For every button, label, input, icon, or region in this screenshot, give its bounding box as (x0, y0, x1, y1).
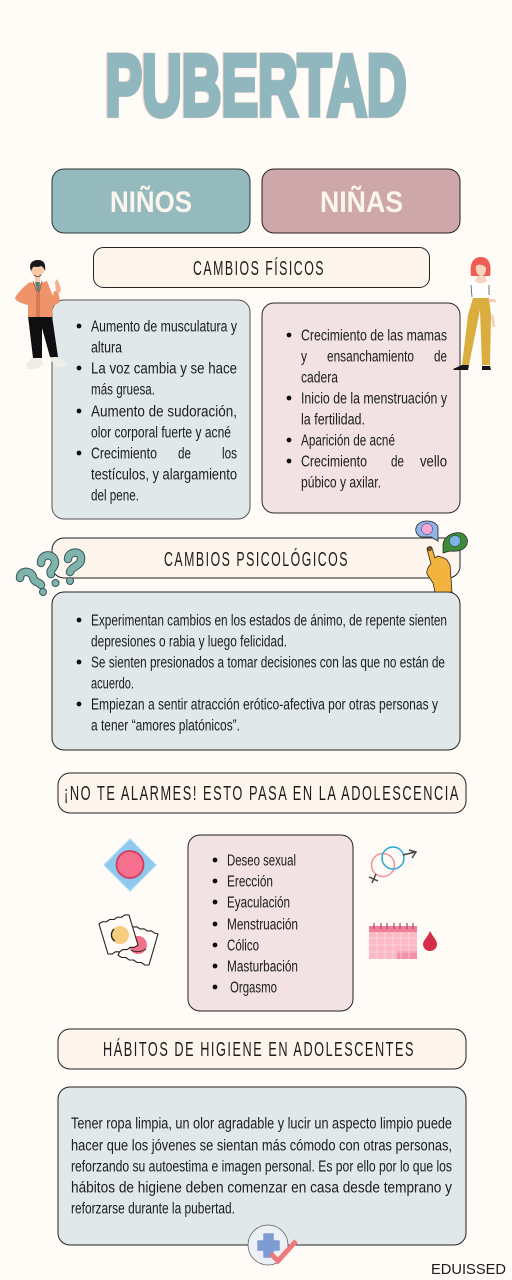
illustration: niño (15, 260, 67, 369)
bullet list: psicológicos: a tener “amores platónicos”. (91, 718, 240, 734)
icon: preservativo azul (104, 839, 156, 891)
heading: cambios físicos (94, 248, 430, 288)
bullet list: niños: olor corporal fuerte y acné (91, 424, 231, 442)
heading: cambios físicos: CAMBIOS FÍSICOS (193, 257, 325, 280)
bullet list: niños: testículos, y alargamiento (91, 466, 237, 484)
panel: cambios físicos niños (52, 300, 250, 519)
bullet list: niñas: Inicio de la menstruación y (301, 390, 447, 408)
bullet list: niñas: ensanchamiento (327, 348, 414, 366)
bullet list: niños: Crecimiento (91, 446, 157, 462)
heading: hábitos de higiene (58, 1029, 466, 1069)
bullet list: psicológicos (77, 612, 447, 734)
bullet list: niñas: de (391, 454, 404, 470)
bullet list: adolescencia: Deseo sexual (227, 852, 296, 870)
bullet list: niños: altura (91, 340, 122, 356)
bullet list: psicológicos: acuerdo. (91, 676, 134, 692)
bullet list: adolescencia: Masturbación (227, 958, 298, 976)
panel: cambios psicológicos (52, 592, 460, 750)
icon: cruz médica con check (248, 1225, 296, 1265)
bullet list: niños: los (222, 446, 237, 462)
bullet list: niñas: la fertilidad. (301, 412, 365, 428)
bullet list: niñas (287, 328, 447, 492)
panel: hábitos de higiene (58, 1087, 466, 1245)
panel: niñas header (262, 169, 460, 233)
bullet list: niños: Aumento de musculatura y (91, 318, 237, 336)
bullet list: psicológicos: depresiones o rabia y luego felicidad. (91, 634, 287, 650)
bullet list: niñas: Crecimiento (301, 454, 367, 470)
heading: cambios psicológicos: CAMBIOS PSICOLÓGICOS (164, 548, 349, 571)
text block: higiene: reforzarse durante la pubertad. (71, 1200, 235, 1218)
heading: cambios psicológicos (52, 538, 460, 578)
bullet list: niños: Aumento de sudoración, (91, 404, 237, 420)
icon: preservativos envueltos (99, 915, 158, 965)
icon: mano con burbujas de chat (416, 521, 467, 592)
panel: niñas header: NIÑAS (320, 185, 403, 219)
panel: niños header (52, 169, 250, 233)
text block: higiene (71, 1116, 452, 1218)
icon: calendario y gota (369, 923, 437, 959)
bullet list: niñas: Crecimiento de las mamas (301, 328, 447, 344)
bullet list: niñas: cadera (301, 370, 338, 386)
bullet list: niños (77, 318, 237, 504)
bullet list: niños: La voz cambia y se hace (91, 360, 237, 378)
bullet list: niños: más gruesa. (91, 382, 155, 398)
panel: lista adolescencia (188, 835, 353, 1011)
bullet list: niños: del pene. (91, 488, 139, 504)
bullet list: adolescencia: Cólico (227, 938, 259, 954)
icon: símbolos de género (369, 847, 416, 883)
panel: cambios físicos niñas (262, 303, 460, 513)
bullet list: niñas: púbico y axilar. (301, 474, 381, 492)
icon: signos de interrogación (20, 553, 81, 596)
illustration: niña (453, 257, 496, 370)
bullet list: niñas: Aparición de acné (301, 432, 395, 450)
text: eduissed: EDUISSED (431, 1261, 506, 1278)
panel: niños header: NIÑOS (110, 185, 192, 219)
bullet list: niñas: vello (420, 454, 447, 470)
bullet list: adolescencia: Erección (227, 874, 273, 890)
bullet list: niños: de (178, 446, 191, 462)
bullet list: niñas: y (301, 348, 307, 366)
bullet list: niñas: de (434, 348, 447, 366)
bullet list: adolescencia: Menstruación (227, 916, 298, 934)
bullet list: adolescencia: Eyaculación (227, 894, 290, 912)
text block: higiene: hábitos de higiene deben comenzar en casa desde temprano y (71, 1180, 452, 1196)
heading: no te alarmes (58, 773, 466, 813)
bullet list: adolescencia: Orgasmo (230, 980, 277, 996)
bullet list: adolescencia (213, 852, 298, 996)
